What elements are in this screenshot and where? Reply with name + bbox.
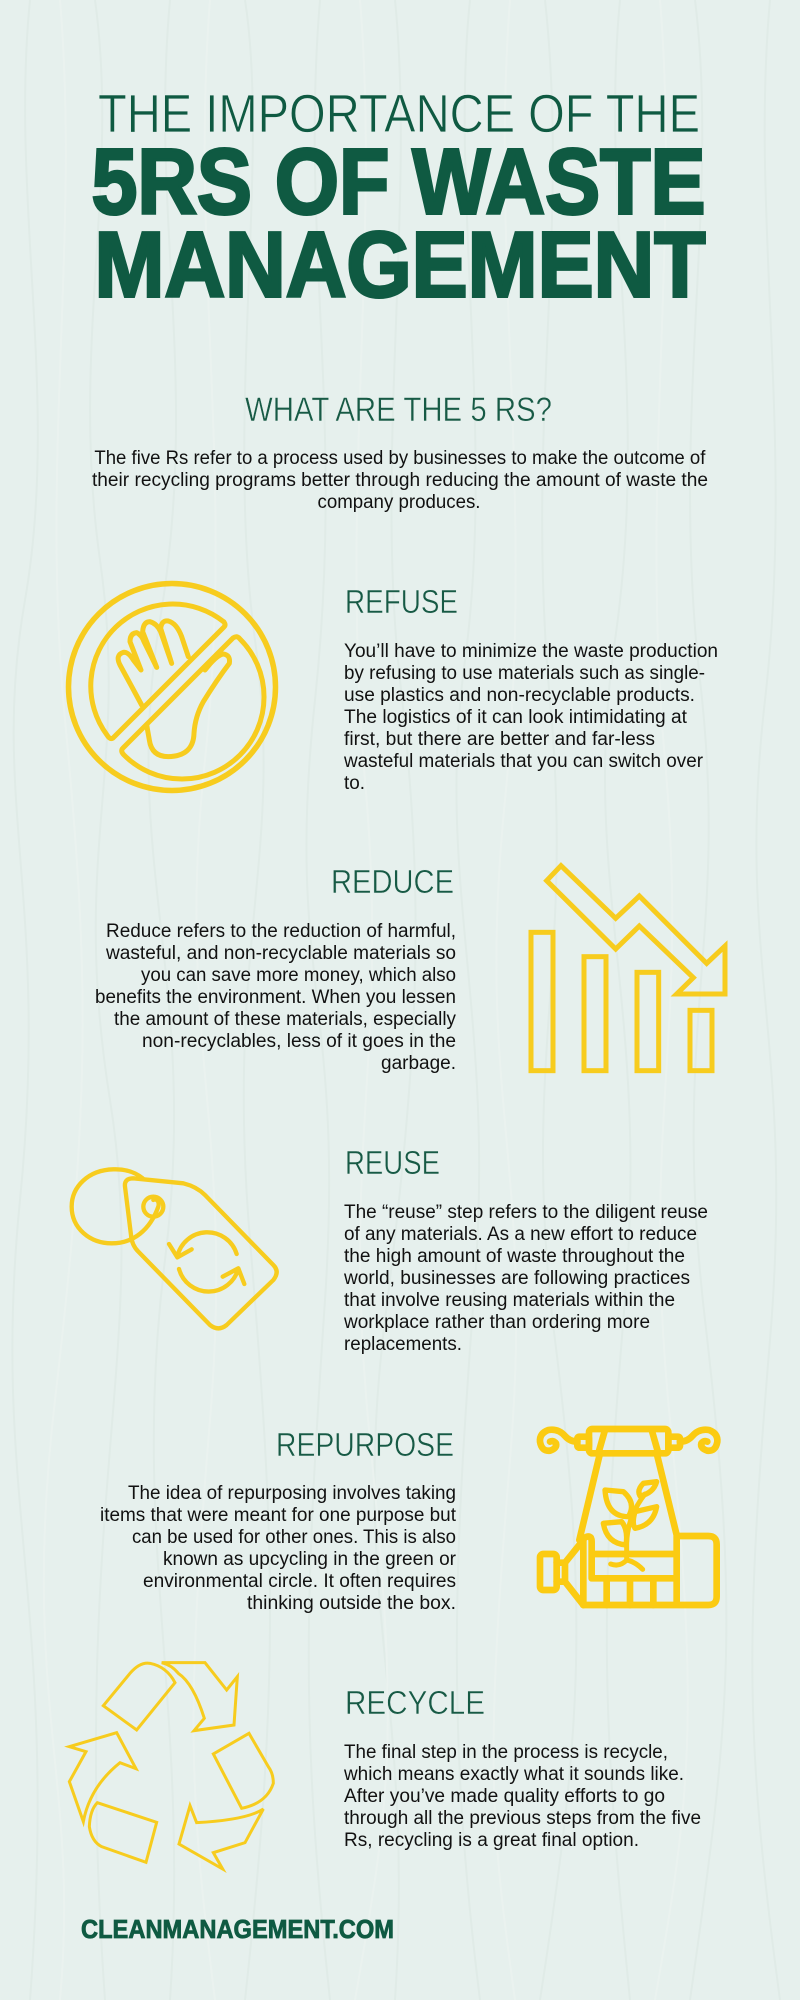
text block: reuse description: of any materials. As a new effort to reduce	[344, 1224, 697, 1245]
panel: reuse	[72, 1144, 708, 1355]
icon: bottle repurposed as planter	[540, 1429, 717, 1605]
text block: reuse description: world, businesses are following practices	[343, 1268, 690, 1289]
text block: reuse description: workplace rather than ordering more	[343, 1312, 650, 1333]
icon: refuse hand in prohibition sign	[68, 584, 276, 790]
text block: repurpose description: The idea of repurposing involves taking	[128, 1483, 456, 1504]
title: 5RS OF WASTE	[92, 130, 706, 234]
heading: refuse: REFUSE	[345, 583, 458, 620]
text block: refuse description	[343, 641, 718, 794]
icon: falling bar chart with arrow	[531, 866, 725, 1071]
text block: repurpose description	[100, 1483, 457, 1614]
text block: refuse description: wasteful materials that you can switch over	[343, 751, 704, 772]
panel: reduce	[95, 863, 725, 1074]
text block: refuse description: first, but there are better and far-less	[344, 729, 655, 750]
title	[92, 84, 706, 316]
footer: website: CLEANMANAGEMENT.COM	[81, 1914, 394, 1944]
text block: recycle description: The final step in the process is recycle,	[344, 1742, 668, 1763]
text block: recycle description	[343, 1742, 701, 1851]
text block: recycle description: Rs, recycling is a great final option.	[344, 1830, 639, 1851]
heading: recycle: RECYCLE	[345, 1684, 485, 1721]
text block: repurpose description: known as upcycling in the green or	[163, 1549, 457, 1570]
heading: repurpose: REPURPOSE	[276, 1426, 454, 1463]
heading: reuse: REUSE	[345, 1144, 440, 1181]
heading: what are the 5 Rs: WHAT ARE THE 5 RS?	[245, 391, 552, 429]
icon: reusable tag with refresh arrows	[72, 1169, 277, 1328]
text block: reduce description	[95, 921, 456, 1074]
panel: repurpose	[100, 1426, 717, 1614]
text block: refuse description: use plastics and non-recyclable products.	[344, 685, 695, 706]
icon: recycling arrows	[69, 1663, 273, 1869]
text block: introduction: The five Rs refer to a process used by businesses to make the outcome of	[94, 448, 706, 469]
text block: introduction	[92, 448, 708, 513]
text block: reuse description: replacements.	[344, 1334, 462, 1355]
text block: reduce description: garbage.	[381, 1053, 456, 1074]
title: MANAGEMENT	[94, 212, 706, 316]
text block: recycle description: which means exactly what it sounds like.	[343, 1764, 684, 1785]
heading: reduce: REDUCE	[331, 863, 454, 900]
text block: reduce description: Reduce refers to the reduction of harmful,	[106, 921, 456, 942]
text block: recycle description: After you’ve made quality efforts to go	[344, 1786, 665, 1807]
text block: refuse description: by refusing to use materials such as single-	[344, 663, 705, 684]
text block: recycle description: through all the previous steps from the five	[344, 1808, 701, 1829]
text block: reduce description: wasteful, and non-recyclable materials so	[105, 943, 456, 964]
text block: introduction: their recycling programs better through reducing the amount of waste the	[92, 470, 708, 491]
text block: repurpose description: thinking outside the box.	[247, 1593, 456, 1614]
text block: reduce description: the amount of these materials, especially	[114, 1009, 456, 1030]
panel: refuse	[68, 583, 718, 794]
text block: introduction: company produces.	[318, 492, 480, 513]
panel: recycle	[69, 1663, 701, 1869]
text block: reuse description: the high amount of waste throughout the	[344, 1246, 685, 1267]
text block: reuse description	[343, 1202, 708, 1355]
text block: repurpose description: environmental circle. It often requires	[143, 1571, 456, 1592]
text block: reuse description: that involve reusing materials within the	[344, 1290, 675, 1311]
text block: reduce description: non-recyclables, less of it goes in the	[142, 1031, 456, 1052]
text block: reduce description: you can save more money, which also	[141, 965, 456, 986]
text block: refuse description: The logistics of it can look intimidating at	[344, 707, 688, 728]
text block: refuse description: You’ll have to minimize the waste production	[344, 641, 718, 662]
title: THE IMPORTANCE OF THE	[98, 84, 700, 144]
text block: reuse description: The “reuse” step refers to the diligent reuse	[344, 1202, 708, 1223]
text block: reduce description: benefits the environment. When you lessen	[95, 987, 456, 1008]
text block: refuse description: to.	[344, 773, 365, 794]
text block: repurpose description: can be used for other ones. This is also	[132, 1527, 456, 1548]
text block: repurpose description: items that were meant for one purpose but	[100, 1505, 457, 1526]
